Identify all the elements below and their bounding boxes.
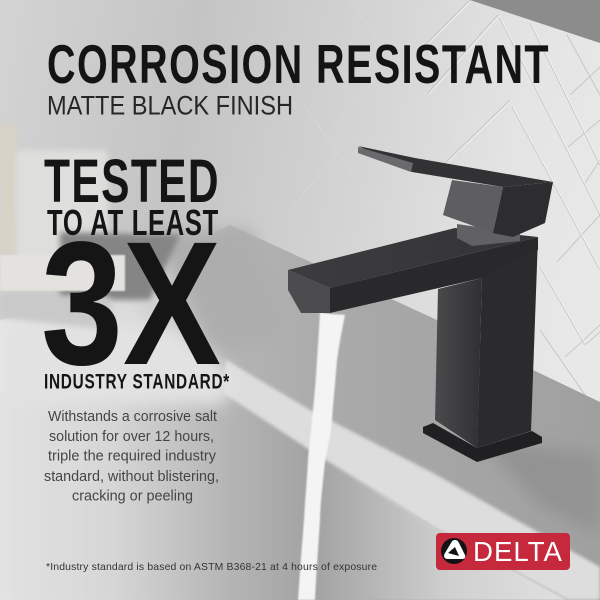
body text: triple the required industry	[48, 448, 217, 464]
headline: tested to at least 3X: TO AT LEAST	[47, 202, 219, 243]
body text: solution for over 12 hours,	[49, 429, 214, 445]
headline: tested to at least 3X: TESTED	[44, 147, 220, 215]
faucet lever	[358, 146, 553, 187]
water stream	[298, 312, 345, 600]
body text: Withstands a corrosive salt	[48, 409, 217, 425]
headline: tested to at least 3X: INDUSTRY STANDARD*	[44, 370, 230, 394]
logo wordmark: DELTA	[473, 536, 563, 567]
body text: cracking or peeling	[72, 488, 193, 504]
subtitle: MATTE BLACK FINISH	[47, 90, 293, 120]
body text	[44, 409, 219, 504]
faucet	[288, 146, 553, 462]
background: marble counter	[0, 225, 600, 600]
faucet spout	[288, 228, 538, 313]
faucet base plate	[423, 423, 542, 462]
Delta logo	[436, 533, 570, 570]
background: blurred jar and tray objects	[0, 125, 180, 330]
faucet stem	[457, 224, 520, 246]
logo mark	[441, 538, 467, 564]
footnote: *Industry standard is based on ASTM B368-21 at 4 hours of exposure	[46, 562, 377, 573]
headline: tested to at least 3X: 3X	[41, 206, 221, 402]
headline: tested to at least 3X	[41, 147, 230, 402]
faucet handle block	[443, 180, 553, 237]
faucet body	[435, 237, 538, 448]
body text: standard, without blistering,	[44, 469, 219, 485]
